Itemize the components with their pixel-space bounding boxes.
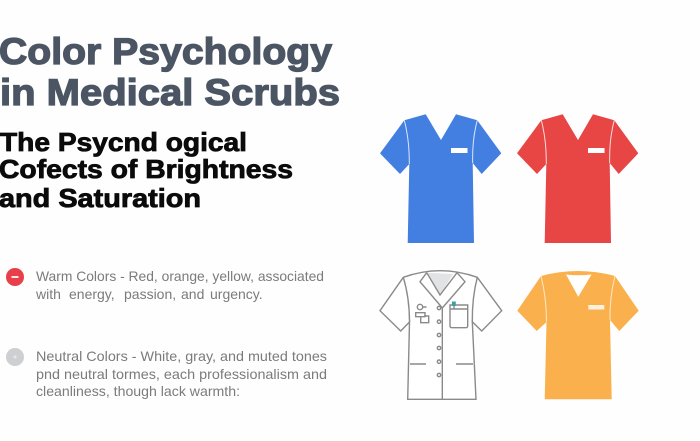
text block: neutral colors: cleanliness, though lack warmth: — [36, 383, 240, 399]
subtitle — [0, 127, 293, 213]
text block: warm colors: Warm Colors - Red, orange, yellow, associated — [36, 268, 324, 284]
text block: warm colors: and — [181, 286, 204, 302]
subtitle: and Saturation — [0, 183, 201, 213]
icon: red scrub top — [517, 114, 638, 243]
text block: warm colors: energy, — [69, 286, 115, 302]
title: in Medical Scrubs — [0, 72, 340, 113]
title: Color Psychology — [0, 31, 332, 72]
subtitle: Cofects of Brightness — [0, 154, 293, 184]
title — [0, 31, 340, 113]
icon: blue scrub top — [380, 114, 501, 243]
text block: neutral colors: pnd neutral tormes, each professionalism and — [36, 366, 327, 382]
text block: warm colors — [35, 268, 324, 302]
text block: neutral colors: Neutral Colors - White, gray, and muted tones — [36, 348, 327, 364]
text block: warm colors: with — [35, 286, 61, 302]
text block: neutral colors — [36, 348, 327, 399]
text block: warm colors: passion, — [124, 286, 176, 302]
icon: white lab coat — [380, 271, 502, 399]
icon: orange scrub top — [517, 271, 639, 399]
subtitle: The Psycnd ogical — [0, 127, 247, 157]
icon: neutral colors bullet — [6, 348, 24, 366]
icon: warm colors bullet — [6, 268, 24, 286]
text block: warm colors: urgency. — [210, 286, 263, 302]
